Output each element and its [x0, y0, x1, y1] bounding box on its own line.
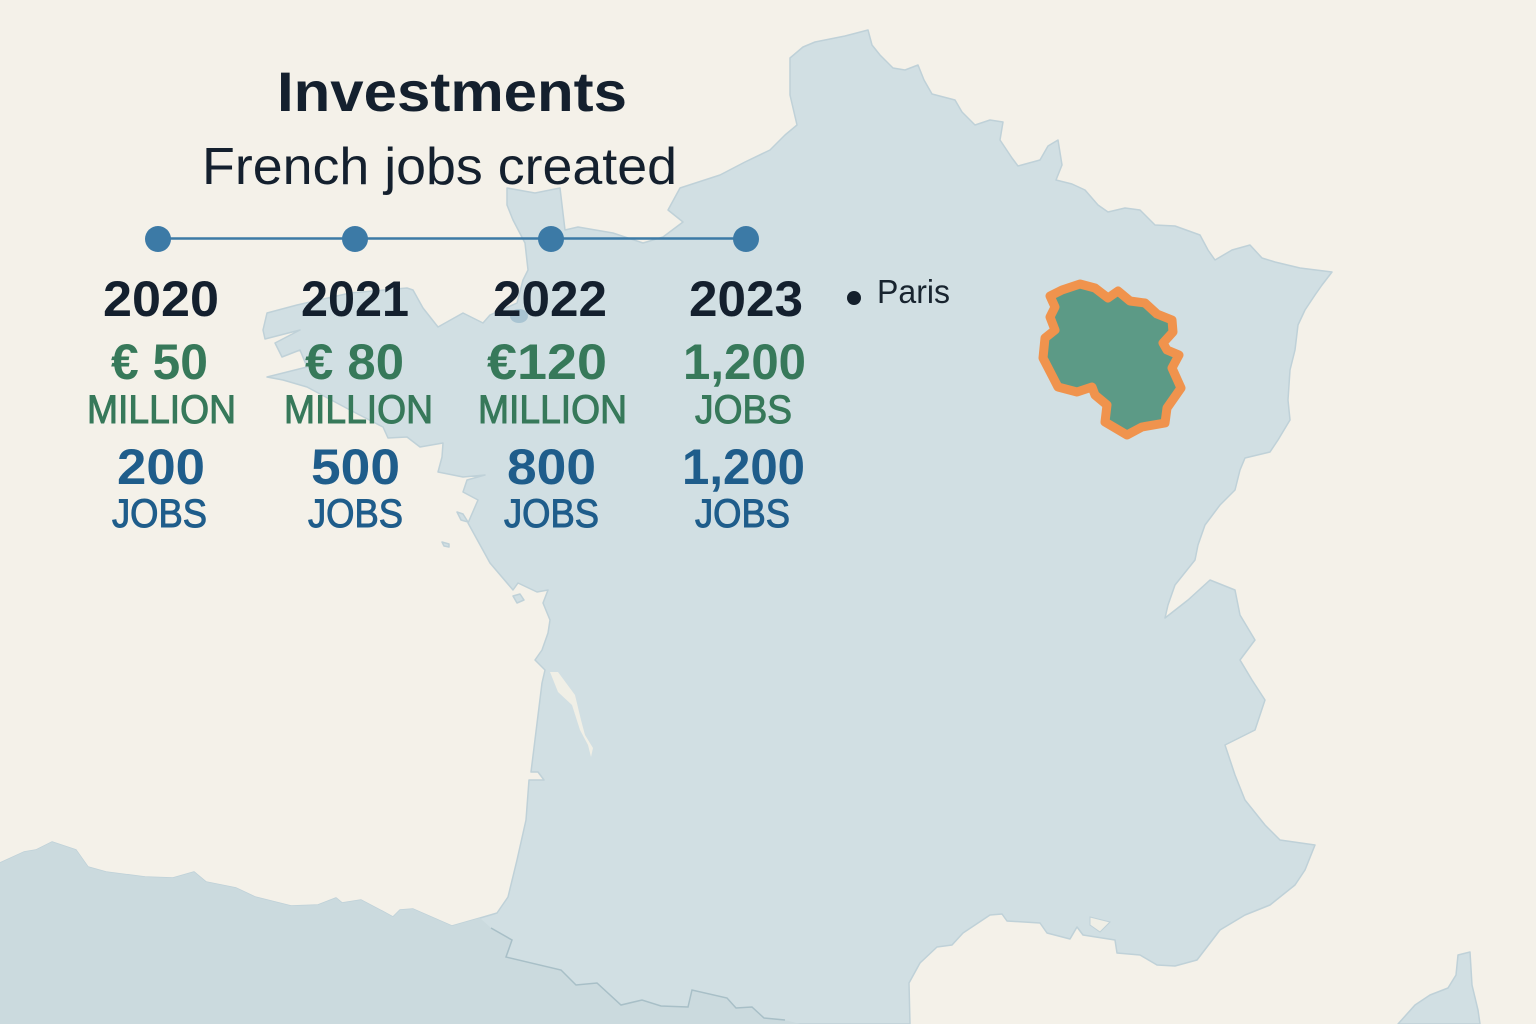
bay near Mont Saint-Michel — [510, 309, 528, 323]
French-Spanish border — [491, 928, 785, 1020]
coastal lagoon — [1090, 917, 1110, 932]
Paris marker: Paris — [877, 273, 950, 310]
column: 2023: 1,200 — [683, 334, 806, 390]
column: 2023: JOBS — [695, 492, 790, 536]
column: 2022 — [478, 271, 627, 536]
column: 2023: 1,200 — [682, 439, 805, 495]
column: 2020: 200 — [117, 439, 205, 495]
Spain — [0, 842, 800, 1024]
column: 2022: 800 — [507, 439, 596, 495]
column: 2021: € 80 — [305, 334, 404, 390]
Gironde estuary — [550, 672, 593, 757]
column: 2022: €120 — [487, 334, 607, 390]
column: 2020: JOBS — [112, 492, 207, 536]
column: 2020: MILLION — [87, 388, 236, 432]
Atlantic islands — [442, 512, 524, 603]
column: 2022: JOBS — [504, 492, 599, 536]
column: 2022: MILLION — [478, 388, 627, 432]
highlighted region — [1043, 284, 1181, 435]
subtitle: French jobs created — [202, 138, 677, 196]
column: 2021: JOBS — [308, 492, 403, 536]
column: 2020: 2020 — [103, 271, 219, 327]
column: 2021: MILLION — [284, 388, 433, 432]
column: 2020: € 50 — [111, 334, 208, 390]
column: 2023: 2023 — [689, 271, 803, 327]
column: 2021 — [284, 271, 433, 536]
Paris marker — [847, 273, 950, 310]
column: 2022: 2022 — [493, 271, 607, 327]
column: 2021: 2021 — [301, 271, 409, 327]
column: 2020 — [87, 271, 236, 536]
Corsica — [1398, 952, 1480, 1024]
column: 2021: 500 — [311, 439, 400, 495]
title: Investments — [277, 60, 627, 123]
column: 2023: JOBS — [695, 388, 792, 432]
timeline — [145, 226, 759, 252]
column: 2023 — [682, 271, 806, 536]
